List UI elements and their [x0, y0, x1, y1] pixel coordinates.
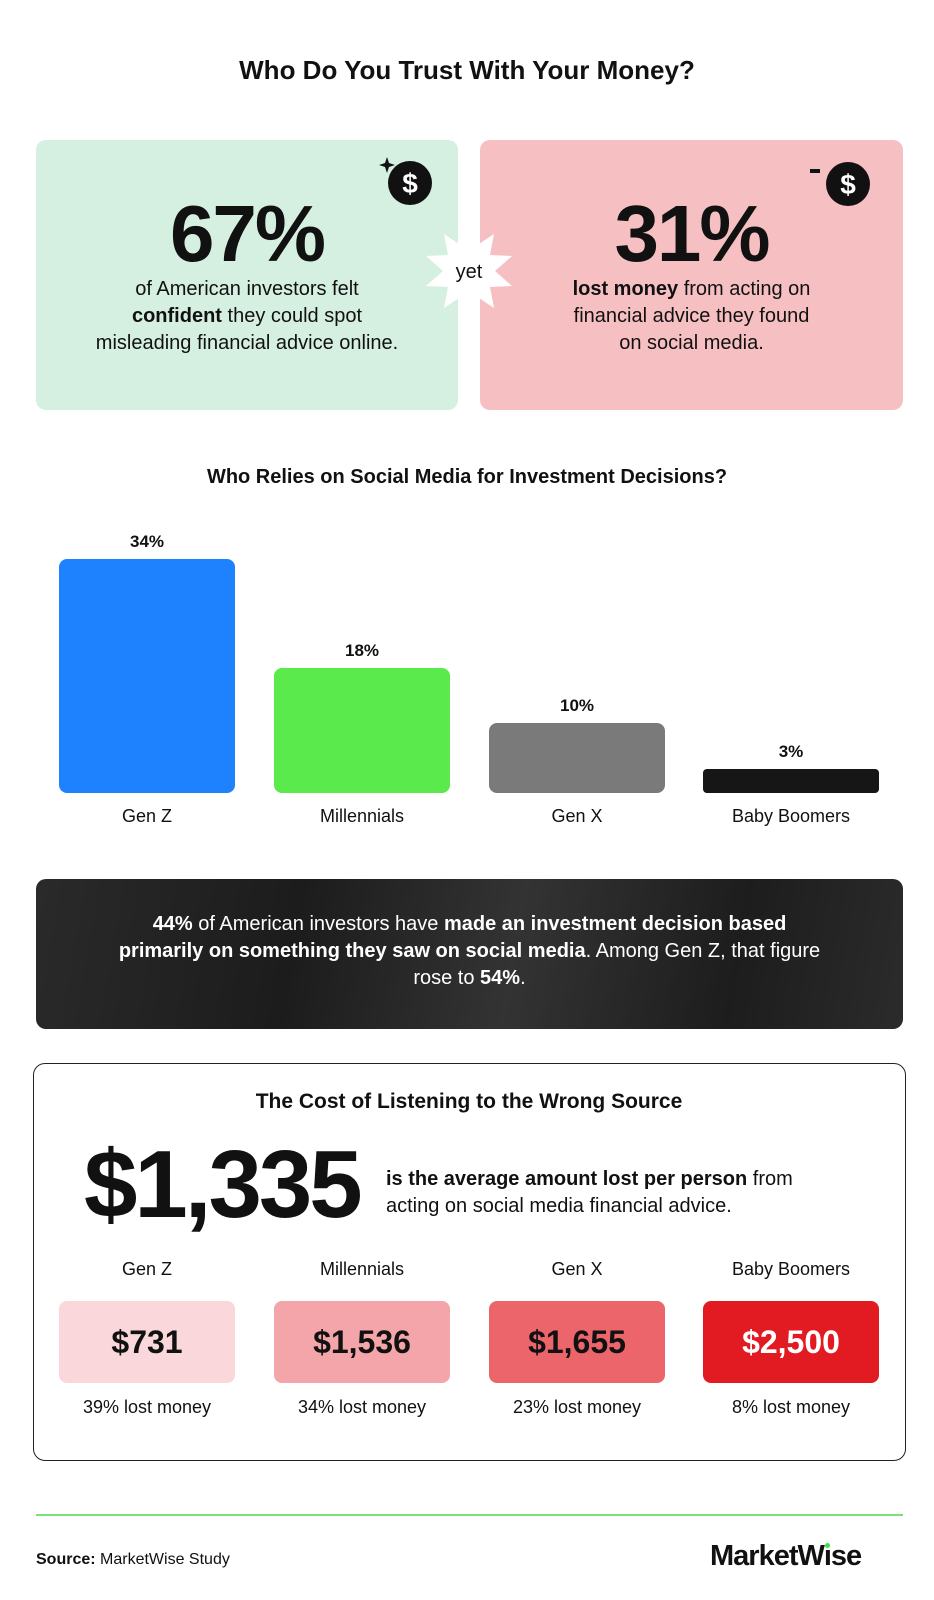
cost: Millennials: 34% lost money [298, 1397, 426, 1417]
callout: 44% dark banner [36, 879, 903, 1029]
cost: Baby Boomers [703, 1259, 879, 1417]
callout: 44% dark banner: 44% of American investors have made an investment decision based primarily on something they saw on social media. Among Gen Z, that figure rose to 54%. [119, 913, 820, 989]
cost: Baby Boomers: $2,500 [742, 1324, 840, 1360]
text: lost money from acting on [573, 278, 810, 300]
cost: Gen X [489, 1259, 665, 1417]
text: of American investors felt [135, 278, 359, 300]
bar: Baby Boomers [703, 742, 879, 826]
bar: Baby Boomers: 3% [779, 742, 803, 761]
cost: Millennials: $1,536 [313, 1324, 411, 1360]
bar: Millennials: Millennials [320, 806, 404, 826]
stat text: is the average amount lost per person from acting on social media financial advice. [386, 1168, 793, 1217]
panel: lost money [480, 140, 903, 410]
logo: MarketWıse [710, 1540, 861, 1572]
bar: Baby Boomers: Baby Boomers [732, 806, 850, 826]
bar: Gen X: Gen X [551, 806, 603, 826]
bar: Millennials: 18% [345, 641, 379, 660]
bar: Gen Z: Gen Z [122, 806, 172, 826]
text: on social media. [619, 332, 764, 354]
bar: Gen Z [59, 532, 235, 826]
panel: cost [33, 1063, 906, 1461]
stat 31%: 31% [614, 189, 769, 278]
bar: Gen X: 10% [560, 696, 594, 715]
cost: Baby Boomers: 8% lost money [732, 1397, 850, 1417]
cost: Gen X: Gen X [551, 1259, 603, 1279]
cost: Gen X: $1,655 [528, 1324, 626, 1360]
cost: Millennials [274, 1259, 450, 1417]
stat 67%: 67% [170, 189, 324, 278]
icon: dollar sparkle [379, 157, 432, 205]
bar chart [59, 532, 879, 826]
badge: yet: yet [456, 261, 483, 283]
cost: Gen Z [59, 1259, 235, 1417]
cost: Gen Z: Gen Z [122, 1259, 172, 1279]
text [573, 278, 810, 354]
icon: dollar minus: $ [840, 169, 856, 200]
cost: Gen Z: 39% lost money [83, 1397, 211, 1417]
title: Who Do You Trust With Your Money? [239, 55, 695, 85]
bar: Gen Z: 34% [130, 532, 164, 551]
panel: confident [36, 140, 458, 410]
heading: reliance: Who Relies on Social Media for Investment Decisions? [207, 466, 727, 488]
text: financial advice they found [574, 305, 809, 327]
cost: Gen X: 23% lost money [513, 1397, 641, 1417]
bar: Millennials [274, 641, 450, 826]
badge: yet [426, 234, 512, 308]
cost: Millennials: Millennials [320, 1259, 404, 1279]
text [96, 278, 398, 354]
bar: Gen X [489, 696, 665, 826]
cost: Baby Boomers: Baby Boomers [732, 1259, 850, 1279]
big stat: $1,335 [84, 1131, 360, 1238]
text: misleading financial advice online. [96, 332, 398, 354]
source: Source: MarketWise Study [36, 1551, 230, 1568]
icon: dollar sparkle: $ [402, 168, 418, 199]
icon: dollar minus [810, 162, 870, 206]
heading: The Cost of Listening to the Wrong Source [256, 1090, 682, 1113]
text: confident they could spot [132, 305, 362, 327]
cost: Gen Z: $731 [111, 1324, 183, 1360]
